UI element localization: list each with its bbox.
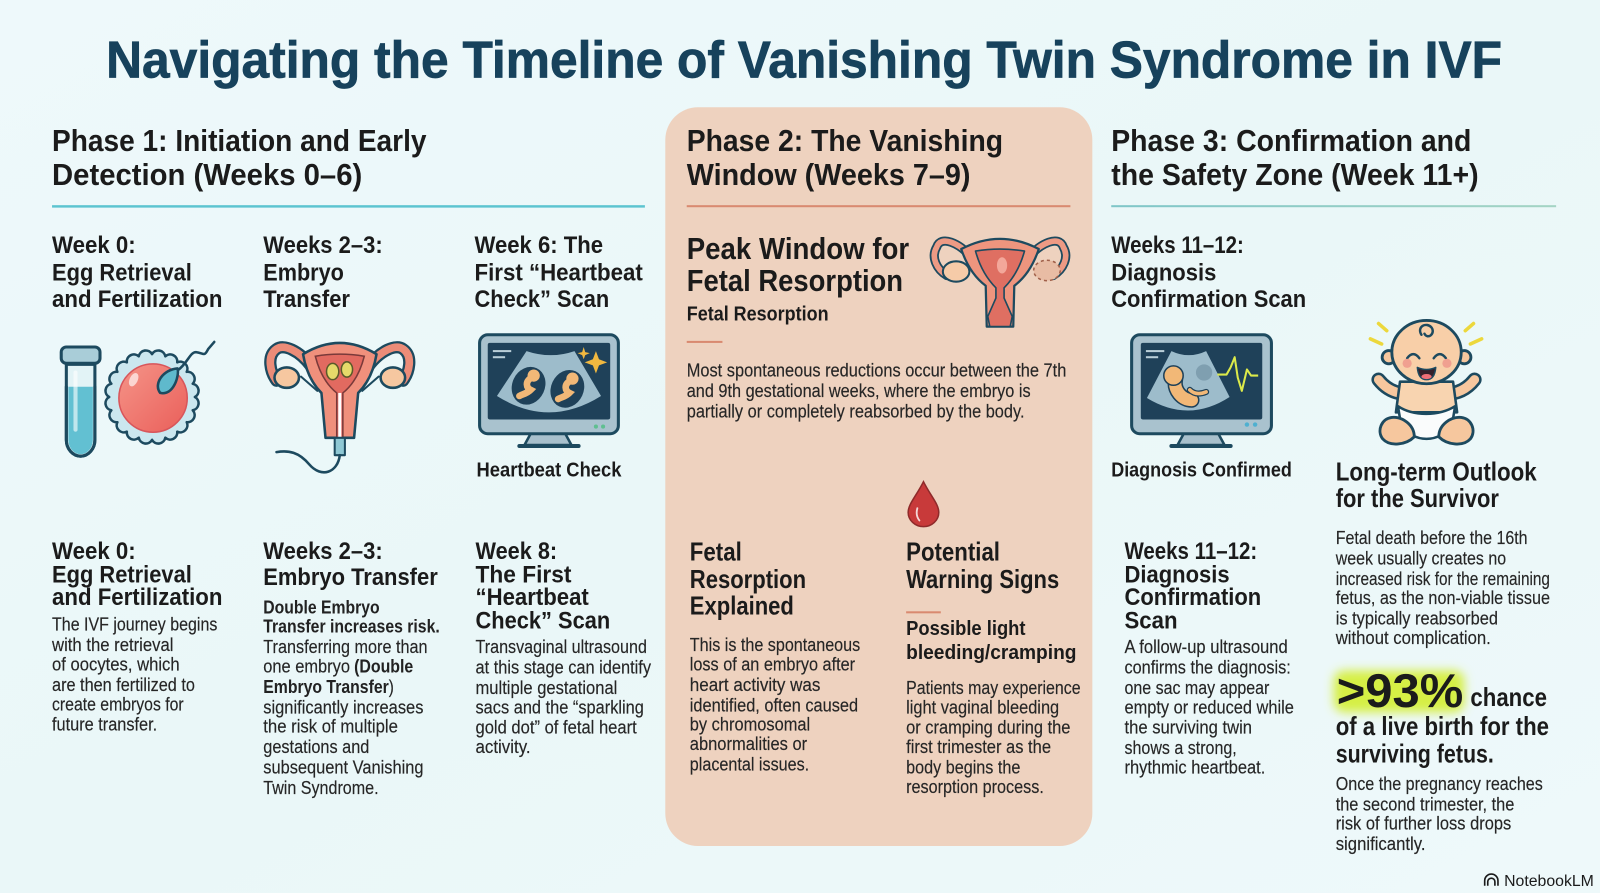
heading: week 0: [52, 232, 222, 313]
phase 3 heading: [1111, 124, 1479, 192]
heading: peak window: [687, 232, 909, 325]
statistic: live birth chance: significantly.: [1336, 833, 1426, 854]
text block: week 0 detail: create embryos for: [52, 693, 184, 714]
text block: weeks 11-12 detail: one sac may appear: [1124, 677, 1269, 698]
icon: happy baby: [1370, 320, 1482, 444]
text block: week 8 detail: “Heartbeat: [476, 584, 589, 611]
text block: weeks 2-3 detail: Transferring more than: [263, 636, 428, 657]
heading: week 6: Week 6: The: [474, 232, 603, 259]
statistic: live birth chance: >93%: [1337, 665, 1463, 717]
text block: weeks 2-3 detail: Embryo Transfer: [263, 676, 389, 697]
heading: week 6: First “Heartbeat: [474, 260, 643, 287]
title: Navigating the Timeline of Vanishing Twin Syndrome in IVF: [106, 32, 1502, 90]
text block: weeks 2-3 detail: (Double: [354, 656, 413, 677]
text block: week 8 detail: activity.: [476, 736, 531, 757]
text block: fetal resorption explained: This is the spontaneous: [690, 634, 860, 655]
text block: fetal resorption explained: by chromosomal: [690, 714, 810, 735]
text block: potential warning signs: body begins the: [906, 757, 1020, 778]
heading: weeks 2-3: Transfer: [263, 286, 350, 313]
icon: blood drop: [908, 482, 939, 527]
statistic: live birth chance: surviving fetus.: [1336, 740, 1494, 768]
text block: week 8 detail: multiple gestational: [476, 677, 617, 698]
statistic: live birth chance: of a live birth for the: [1336, 713, 1549, 741]
text block: weeks 2-3 detail: one embryo: [263, 656, 350, 677]
heading: weeks 2-3: Embryo: [263, 260, 344, 287]
text block: week 0 detail: future transfer.: [52, 714, 157, 735]
panel background: [665, 107, 1092, 846]
heading: weeks 11-12: Diagnosis: [1111, 260, 1216, 287]
text block: week 8 detail: Check” Scan: [476, 608, 610, 635]
text block: week 8 detail: at this stage can identify: [476, 657, 652, 678]
statistic: live birth chance: chance: [1470, 684, 1547, 712]
text block: potential warning signs: bleeding/cramping: [906, 642, 1077, 664]
logo: NotebookLM: NotebookLM: [1504, 873, 1594, 890]
text block: potential warning signs: Possible light: [906, 618, 1026, 640]
phase 3 heading: the Safety Zone (Week 11+): [1111, 158, 1479, 192]
text block: potential warning signs: Patients may experience: [906, 677, 1081, 698]
phase 2 heading: Phase 2: The Vanishing: [687, 124, 1003, 158]
text block: potential warning signs: or cramping during the: [906, 717, 1070, 738]
text block: weeks 11-12 detail: Weeks 11–12:: [1124, 538, 1257, 565]
statistic: live birth chance: the second trimester, the: [1336, 793, 1514, 814]
text block: long-term outlook: [1335, 459, 1550, 648]
icon: test tube and egg: [61, 342, 214, 456]
icon: ultrasound monitor with heartbeat: [1132, 335, 1271, 448]
heading: week 6: Check” Scan: [474, 286, 609, 313]
text block: fetal resorption explained: Fetal: [690, 538, 742, 566]
text block: week 0 detail: with the retrieval: [51, 634, 173, 655]
text block: peak window description: [687, 360, 1066, 421]
text block: fetal resorption explained: heart activity was: [690, 674, 820, 695]
text block: weeks 11-12 detail: empty or reduced while: [1124, 696, 1294, 717]
statistic: live birth chance: risk of further loss drops: [1336, 813, 1511, 834]
text block: weeks 2-3 detail: Weeks 2–3:: [263, 538, 383, 565]
text block: weeks 11-12 detail: Scan: [1124, 608, 1178, 635]
text block: week 8 detail: gold dot” of fetal heart: [476, 717, 637, 738]
heading: weeks 2-3: Weeks 2–3:: [263, 232, 383, 259]
phase 1 heading: Detection (Weeks 0–6): [52, 158, 362, 192]
text block: potential warning signs: first trimester as the: [906, 736, 1051, 757]
text block: weeks 2-3 detail: [263, 538, 440, 798]
text block: week 0 detail: Week 0:: [52, 538, 136, 565]
text block: fetal resorption explained: Explained: [690, 592, 794, 620]
text block: potential warning signs: Potential: [906, 538, 1000, 566]
icon label: diagnosis confirmed: Diagnosis Confirmed: [1111, 460, 1292, 482]
text block: weeks 11-12 detail: [1124, 538, 1294, 778]
heading: weeks 11-12: Weeks 11–12:: [1111, 232, 1244, 259]
phase 2 heading: [687, 124, 1003, 192]
text block: week 0 detail: and Fertilization: [52, 584, 222, 611]
text block: week 8 detail: sacs and the “sparkling: [476, 696, 644, 717]
text block: potential warning signs: light vaginal bleeding: [906, 696, 1059, 717]
heading: week 0: Egg Retrieval: [52, 260, 192, 287]
text block: long-term outlook: without complication.: [1335, 627, 1491, 648]
text block: weeks 11-12 detail: Confirmation: [1124, 584, 1261, 611]
text block: week 0 detail: Egg Retrieval: [52, 562, 192, 589]
heading: peak window: Fetal Resorption: [687, 264, 903, 298]
text block: weeks 2-3 detail: ): [389, 676, 394, 697]
text block: long-term outlook: fetus, as the non-viable tissue: [1336, 587, 1550, 608]
phase 3 heading: Phase 3: Confirmation and: [1111, 124, 1471, 158]
panel: phase 3: [1111, 124, 1556, 854]
text block: fetal resorption explained: placental issues.: [690, 753, 809, 774]
text block: weeks 2-3 detail: Double Embryo: [263, 596, 380, 617]
text block: long-term outlook: Long-term Outlook: [1336, 459, 1537, 487]
phase 2 heading: Window (Weeks 7–9): [687, 158, 970, 192]
statistic: live birth chance: [1334, 665, 1549, 854]
text block: weeks 2-3 detail: Twin Syndrome.: [263, 777, 379, 798]
icon label: heartbeat check: Heartbeat Check: [477, 460, 622, 482]
text block: weeks 11-12 detail: rhythmic heartbeat.: [1124, 757, 1265, 778]
text block: fetal resorption explained: loss of an embryo after: [690, 653, 855, 674]
heading: weeks 2-3: [263, 232, 383, 313]
text block: weeks 2-3 detail: subsequent Vanishing: [263, 757, 423, 778]
text block: fetal resorption explained: Resorption: [690, 566, 806, 594]
text block: weeks 2-3 detail: Transfer increases risk.: [263, 616, 440, 637]
text block: peak window description: Most spontaneous reductions occur between the 7th: [687, 360, 1066, 381]
text block: week 8 detail: The First: [476, 562, 571, 589]
text block: long-term outlook: for the Survivor: [1336, 485, 1499, 513]
text block: week 8 detail: [476, 538, 652, 757]
text block: fetal resorption explained: abnormalities or: [690, 733, 807, 754]
text block: long-term outlook: is typically reabsorbed: [1336, 608, 1498, 629]
text block: long-term outlook: increased risk for the remaining: [1336, 568, 1550, 589]
text block: week 0 detail: are then fertilized to: [52, 674, 195, 695]
heading: weeks 11-12: Confirmation Scan: [1111, 286, 1306, 313]
heading: week 0: and Fertilization: [52, 286, 222, 313]
phase 1 heading: Phase 1: Initiation and Early: [52, 124, 427, 158]
text block: week 0 detail: [51, 538, 222, 735]
text block: weeks 2-3 detail: the risk of multiple: [263, 716, 398, 737]
text block: week 0 detail: The IVF journey begins: [52, 614, 217, 635]
heading: peak window: Fetal Resorption: [687, 303, 829, 325]
heading: weeks 11-12: [1111, 232, 1306, 313]
text block: weeks 11-12 detail: shows a strong,: [1124, 737, 1237, 758]
text block: weeks 2-3 detail: significantly increases: [263, 696, 423, 717]
text block: week 8 detail: Week 8:: [476, 538, 557, 565]
heading: peak window: Peak Window for: [687, 232, 909, 266]
heading: week 0: Week 0:: [52, 232, 136, 259]
icon: uterus with catheter: [270, 343, 409, 472]
heading: week 6: [474, 232, 643, 313]
text block: peak window description: partially or completely reabsorbed by the body.: [687, 400, 1024, 421]
icon: uterus with resorbed embryo: [934, 239, 1066, 327]
text block: fetal resorption explained: [690, 538, 860, 774]
text block: weeks 11-12 detail: Diagnosis: [1124, 562, 1230, 589]
panel: phase 2: [665, 107, 1092, 846]
icon: ultrasound monitor with twins: [480, 335, 618, 448]
text block: long-term outlook: Fetal death before the 16th: [1336, 527, 1528, 548]
text block: weeks 11-12 detail: the surviving twin: [1124, 717, 1252, 738]
text block: weeks 11-12 detail: confirms the diagnosis:: [1124, 657, 1291, 678]
text block: long-term outlook: week usually creates no: [1335, 547, 1506, 568]
statistic: live birth chance: Once the pregnancy reaches: [1336, 773, 1543, 794]
text block: fetal resorption explained: identified, often caused: [690, 694, 858, 715]
text block: weeks 11-12 detail: A follow-up ultrasound: [1124, 636, 1288, 657]
text block: week 8 detail: Transvaginal ultrasound: [476, 636, 647, 657]
phase 1 heading: [52, 124, 427, 192]
panel: phase 1: [51, 124, 652, 798]
text block: potential warning signs: Warning Signs: [906, 566, 1059, 594]
text block: weeks 2-3 detail: gestations and: [263, 736, 369, 757]
text block: potential warning signs: [906, 538, 1081, 797]
text block: week 0 detail: of oocytes, which: [52, 653, 180, 674]
text block: potential warning signs: resorption process.: [906, 776, 1044, 797]
text block: weeks 2-3 detail: Embryo Transfer: [263, 564, 438, 591]
text block: peak window description: and 9th gestational weeks, where the embryo is: [687, 380, 1031, 401]
